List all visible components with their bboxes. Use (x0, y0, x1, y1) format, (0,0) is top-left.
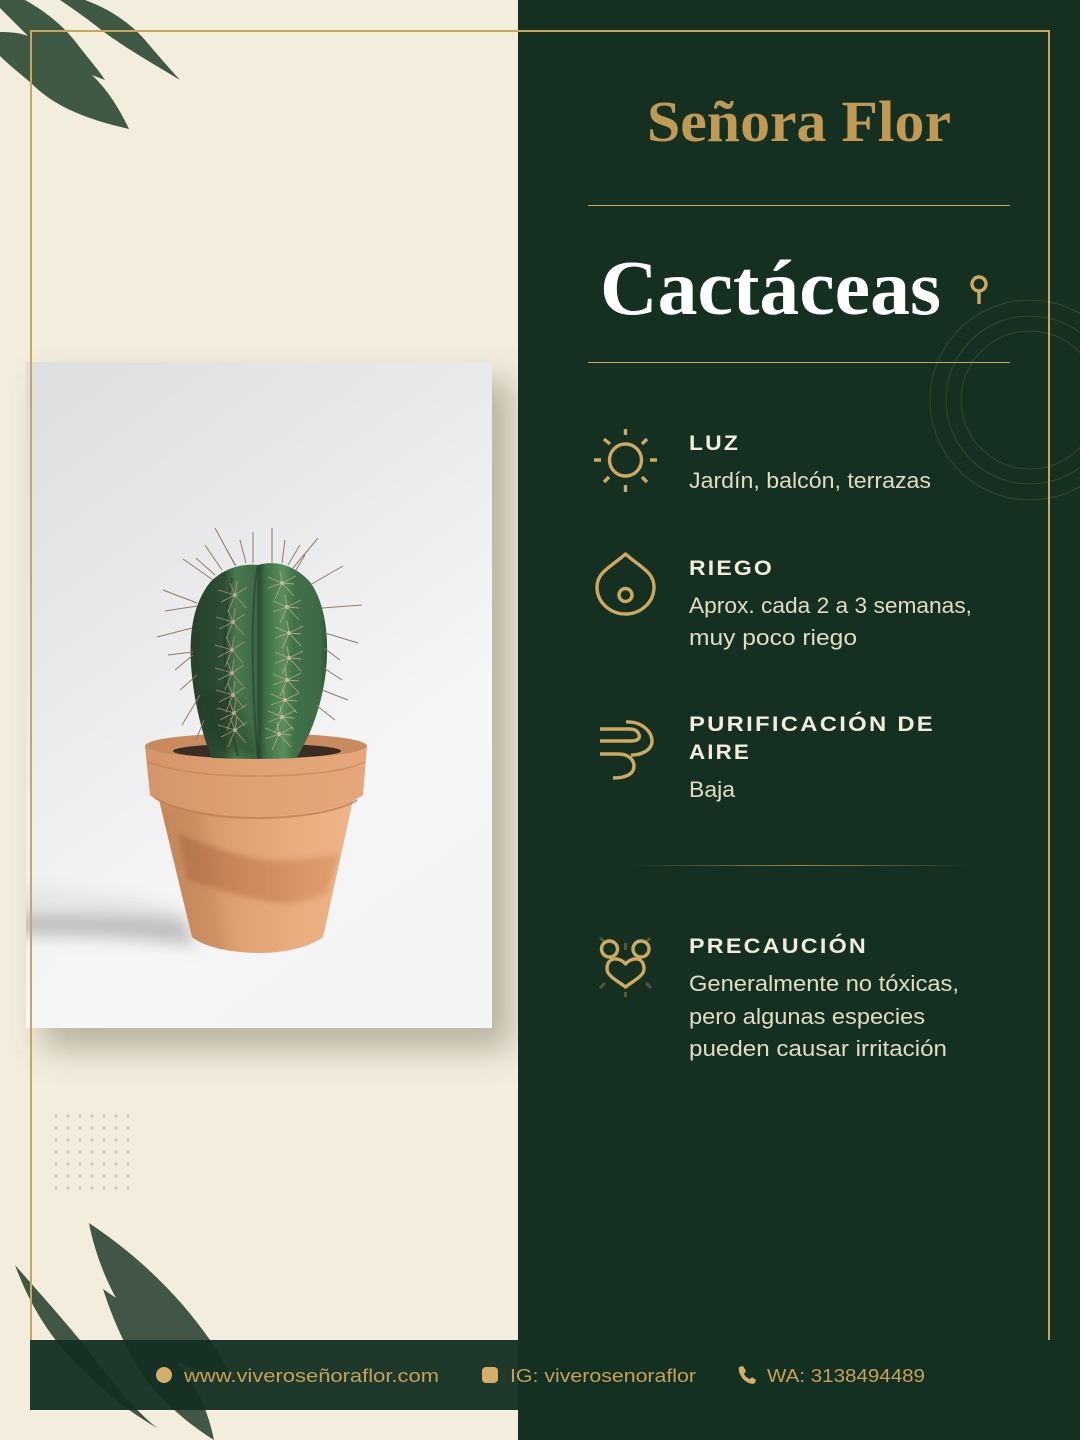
footer: instagram: IG: viverosenoraflor (510, 1365, 696, 1386)
icon: wind (600, 722, 652, 778)
text: precaucion: pero algunas especies (689, 1004, 925, 1029)
cactus spines (157, 528, 362, 750)
decorative concentric circles (930, 300, 1080, 500)
pot back rim (145, 733, 367, 759)
dot grid decoration (54, 1114, 130, 1190)
label: purificacion de aire (689, 712, 935, 764)
leaves: bottom left corner (15, 1223, 229, 1440)
floor shadow of pot (10, 885, 195, 946)
photo: cactus in terracotta pot (10, 362, 492, 1028)
icon: pin (972, 277, 986, 304)
text: luz: Jardín, balcón, terrazas (689, 468, 931, 493)
soil (173, 744, 341, 758)
cactus body (191, 563, 327, 760)
text: precaucion: Generalmente no tóxicas, (689, 971, 959, 996)
label: riego: RIEGO (689, 557, 774, 580)
label: precaucion: PRECAUCIÓN (689, 934, 868, 958)
panel repaint to clip the photo shadow (518, 300, 548, 1100)
label: purificacion de aire: PURIFICACIÓN DE (689, 712, 935, 736)
item: luz (594, 429, 931, 493)
brand heading: Señora Flor (647, 89, 951, 154)
text: riego: muy poco riego (689, 625, 857, 650)
item: riego (597, 554, 972, 650)
footer: website: www.viveroseñoraflor.com (183, 1365, 439, 1386)
text: riego (689, 593, 972, 650)
icon: sun (594, 429, 657, 492)
background: cream left column (0, 0, 518, 1440)
icon: water drop (597, 554, 654, 614)
text: precaucion (689, 971, 959, 1061)
title: Cactáceas (600, 244, 941, 331)
item: purificacion de aire (600, 712, 935, 802)
footer bar (30, 1340, 1050, 1410)
text: riego: Aprox. cada 2 a 3 semanas, (689, 593, 972, 618)
text: precaucion: pueden causar irritación (689, 1036, 947, 1061)
label: luz: LUZ (689, 432, 740, 455)
pot front (145, 746, 367, 960)
label: purificacion de aire: AIRE (689, 741, 751, 764)
text: purificacion de aire: Baja (689, 777, 736, 802)
icon: heart with circles (600, 938, 651, 997)
rule below title (588, 362, 1010, 363)
background: dark green right panel (518, 0, 1080, 1440)
footer: whatsapp: WA: 3138494489 (767, 1365, 925, 1386)
item: precaucion (600, 934, 959, 1061)
leaves: top left corner (0, 0, 180, 129)
divider (630, 865, 970, 866)
rule above title (588, 205, 1010, 206)
photo shadow (42, 380, 512, 1050)
